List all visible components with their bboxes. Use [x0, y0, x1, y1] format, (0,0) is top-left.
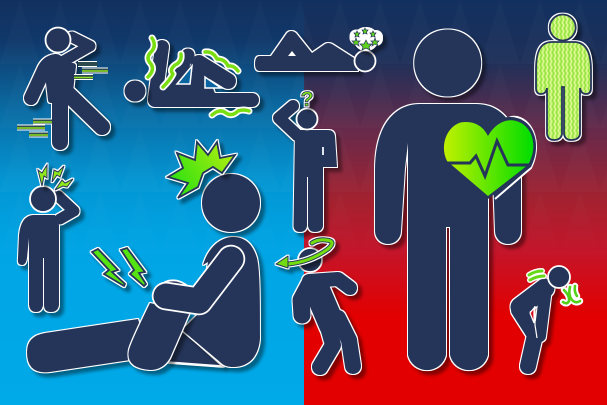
icon: speed lines [17, 64, 108, 135]
arm edge [535, 306, 537, 338]
torso [182, 237, 260, 367]
body shape [255, 31, 358, 71]
figure: small person with headache [18, 165, 74, 312]
gap right [205, 77, 221, 88]
icon: walking body [31, 37, 102, 142]
figure: bent person being sick [519, 266, 580, 366]
notch [288, 51, 296, 56]
body [375, 104, 521, 370]
head [550, 14, 576, 40]
head [124, 80, 146, 102]
pulse line [447, 141, 529, 176]
icon: double lightning bolts [92, 248, 146, 286]
pocket line [322, 147, 324, 155]
knee gap [530, 308, 534, 323]
gap left [177, 66, 192, 84]
heart white outline [495, 117, 536, 199]
head [298, 248, 322, 272]
figure: large central person [375, 30, 521, 370]
icon: stooped body [301, 279, 353, 367]
head [414, 30, 481, 96]
icon: question mark: ? [301, 88, 313, 111]
head [296, 108, 318, 130]
heart dark outline [441, 117, 536, 199]
arm [166, 259, 231, 301]
head [202, 174, 260, 232]
head [46, 28, 70, 52]
triangle under thigh [168, 330, 222, 366]
figure: confused person with question mark [279, 88, 337, 232]
icon: burst [168, 142, 235, 198]
head [548, 266, 570, 288]
icon: bent body [519, 288, 546, 366]
icon: pain squiggles [148, 38, 249, 115]
icon: lightning bolts [38, 165, 73, 190]
figure: dizzy stooped person [276, 240, 353, 367]
head [30, 186, 56, 212]
background: red side [304, 0, 607, 405]
body [536, 42, 591, 140]
bent leg [128, 303, 190, 370]
icon: back pain arcs [529, 271, 544, 280]
icon: heart with pulse [441, 117, 536, 199]
knee [165, 280, 189, 292]
figure: walking person with neck and joint pain [17, 28, 108, 142]
icon: vomit squiggles [563, 286, 580, 303]
head [354, 50, 376, 72]
body shape [279, 106, 337, 232]
icon: lying body [152, 47, 252, 100]
extended leg [27, 319, 150, 372]
heart fill [444, 120, 533, 196]
icon: dizzy ring arrow [276, 240, 332, 268]
figure: green patterned person [536, 14, 591, 140]
body shape [18, 196, 74, 312]
figure: large seated person with head pain [27, 142, 260, 372]
background: blue side [0, 0, 304, 405]
icon: stars [350, 28, 382, 50]
figure: person lying with stars [255, 28, 382, 72]
figure: person lying with body pain [124, 38, 252, 115]
